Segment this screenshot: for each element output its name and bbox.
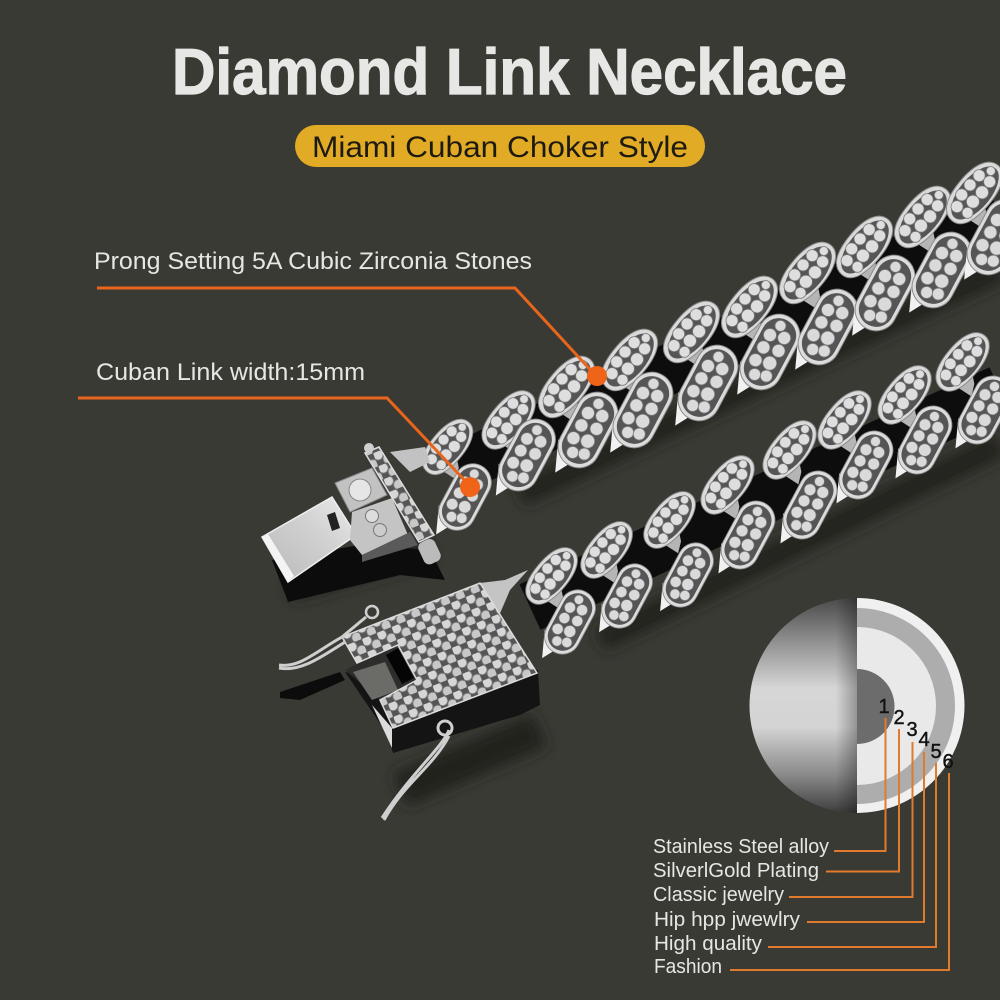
lower clasp: [279, 570, 540, 820]
layer numbers: 5: [930, 741, 942, 763]
layer labels: Stainless Steel alloy: [653, 836, 829, 858]
layer labels: Fashion: [654, 956, 722, 978]
layer labels: Hip hpp jwewlry: [654, 909, 800, 931]
necklace chain: lower strand: [517, 324, 1000, 670]
layer labels: High quality: [654, 933, 762, 955]
layer numbers: 6: [942, 751, 954, 773]
layer numbers: 1: [878, 696, 890, 718]
layer numbers: [878, 696, 954, 773]
callout: link width: Cuban Link width:15mm: [96, 359, 365, 386]
leader lines: [730, 718, 949, 970]
subtitle pill: [295, 125, 705, 167]
callout: link width: [78, 359, 480, 497]
title: Diamond Link Necklace: [172, 35, 847, 108]
layer labels: [653, 836, 829, 978]
necklace shadows: [290, 270, 1000, 790]
layer labels: Classic jewelry: [653, 884, 784, 906]
layer labels: SilverlGold Plating: [653, 860, 819, 882]
callout: stones: [94, 248, 607, 386]
layer numbers: 2: [893, 707, 905, 729]
layer numbers: 3: [906, 719, 918, 741]
layer numbers: 4: [918, 729, 930, 751]
callout: stones: Prong Setting 5A Cubic Zirconia Stones: [94, 248, 532, 275]
subtitle pill: Miami Cuban Choker Style: [312, 131, 688, 164]
cross-section diagram: [750, 598, 965, 813]
upper clasp: [262, 443, 445, 602]
necklace chain: upper strand: [414, 153, 1000, 547]
